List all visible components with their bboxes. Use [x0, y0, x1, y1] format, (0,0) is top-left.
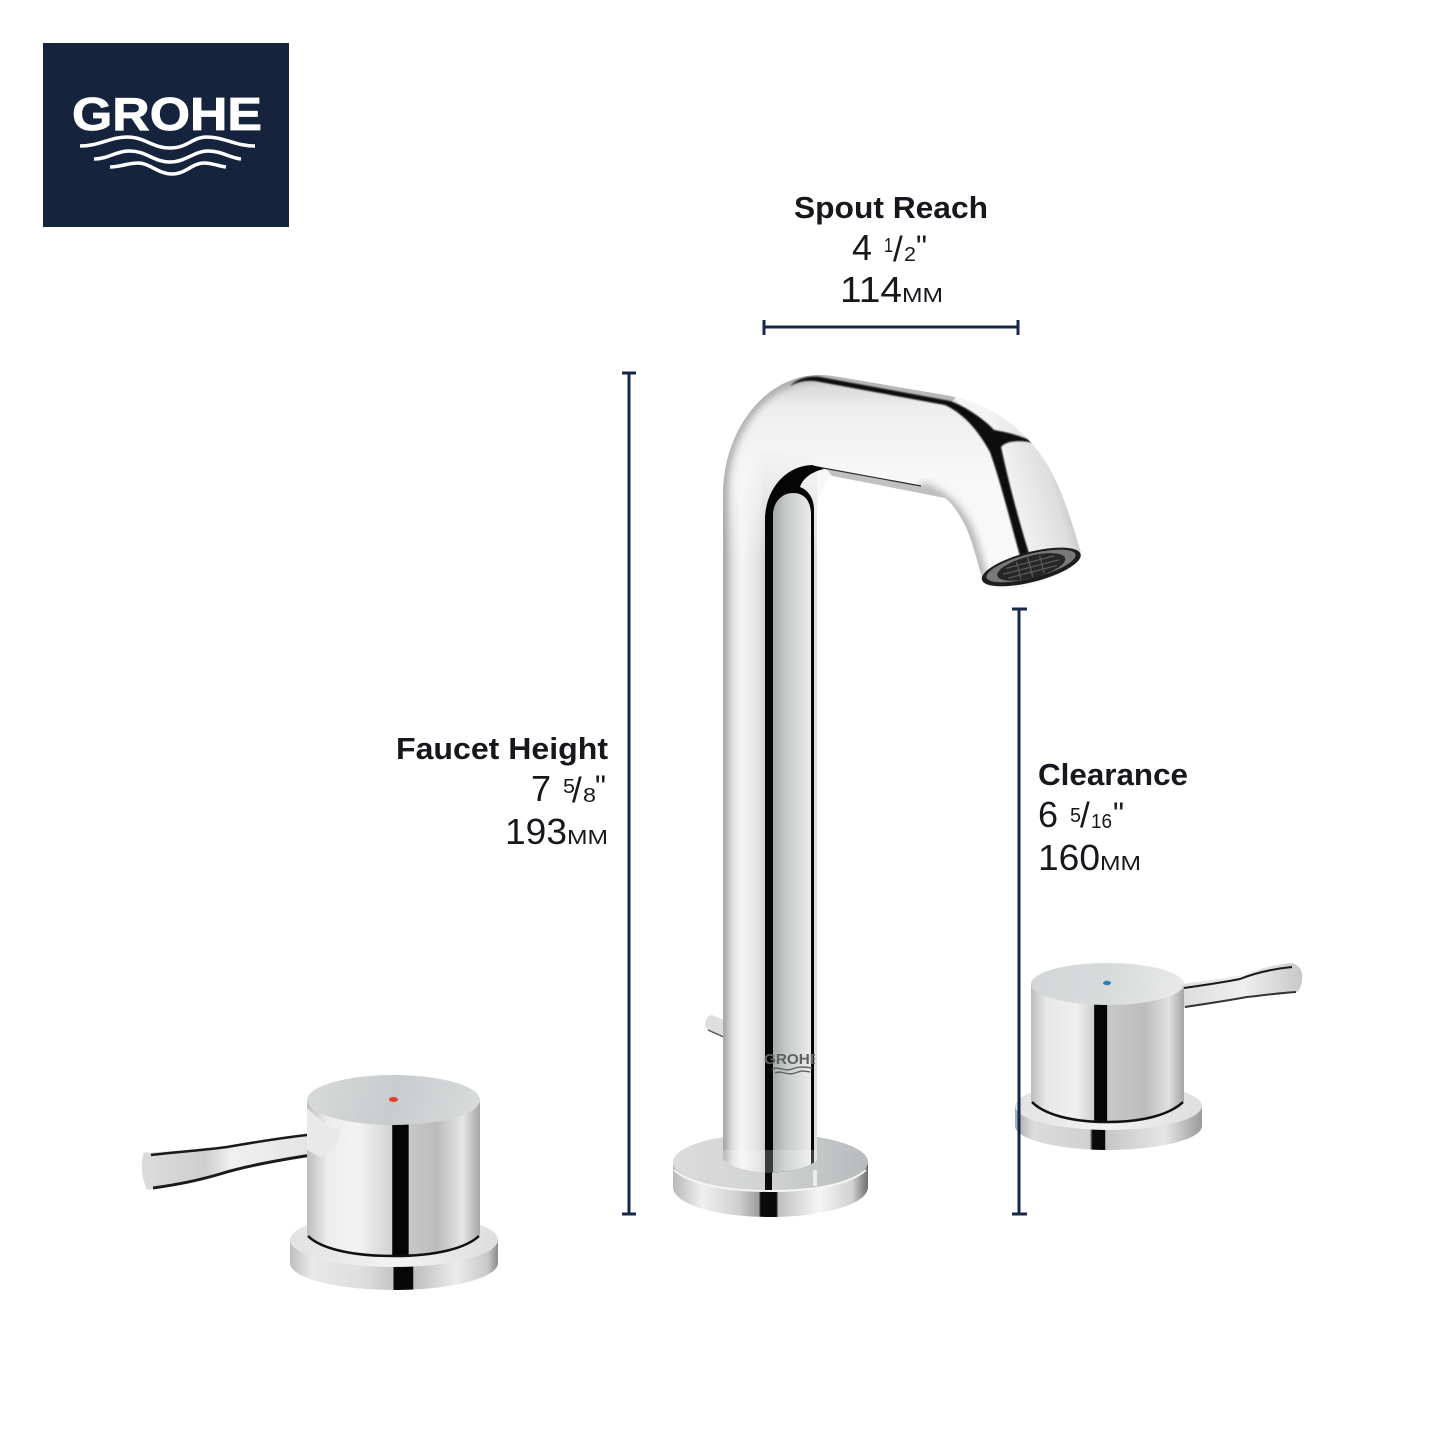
- label: spout reach: [794, 190, 988, 310]
- label: faucet height: 7: [531, 768, 551, 809]
- left handle cylinder: [307, 1075, 480, 1256]
- logo: GROHE: [43, 43, 289, 227]
- cold indicator dot: [1103, 981, 1111, 985]
- engraved logo on column: [764, 1054, 815, 1075]
- label: clearance: ": [1113, 796, 1124, 832]
- aerator: [978, 540, 1084, 594]
- right handle (cold): [1015, 963, 1302, 1150]
- logo: GROHE: GROHE: [72, 88, 262, 140]
- label: spout reach: Spout Reach: [794, 190, 988, 225]
- label: spout reach: 4: [852, 227, 872, 268]
- column lower reflection: [723, 1150, 814, 1172]
- faucet base plate: [673, 1134, 868, 1217]
- right handle lever: [1182, 963, 1302, 1008]
- pop-up rod: [705, 1015, 726, 1038]
- label: faucet height: [396, 731, 608, 852]
- label: clearance: MM: [1100, 853, 1141, 875]
- label: faucet height: Faucet Height: [396, 731, 608, 766]
- label: spout reach: 1: [884, 235, 893, 257]
- right handle cylinder: [1031, 963, 1184, 1122]
- label: spout reach: 2: [904, 244, 916, 266]
- label: spout reach: /: [893, 230, 903, 269]
- label: spout reach: 114: [840, 269, 902, 310]
- left handle base ring: [290, 1213, 498, 1290]
- label: clearance: 16: [1091, 811, 1112, 833]
- faucet body and spout: [720, 370, 1085, 1180]
- dimension line: clearance: [1012, 609, 1027, 1214]
- label: clearance: Clearance: [1038, 757, 1188, 792]
- label: faucet height: 8: [583, 785, 596, 807]
- label: clearance: 6: [1038, 794, 1058, 835]
- black reflection: column stripe: [765, 465, 824, 1175]
- label: faucet height: MM: [567, 827, 608, 849]
- left handle lever: [140, 1132, 320, 1191]
- label: clearance: 5: [1070, 805, 1081, 827]
- dimension line: spout reach: [764, 320, 1018, 335]
- label: spout reach: MM: [902, 285, 943, 307]
- engraved logo on column: GROHE: [764, 1051, 820, 1068]
- left handle (hot): [140, 1075, 498, 1290]
- label: clearance: 160: [1038, 837, 1100, 878]
- label: spout reach: ": [916, 229, 927, 265]
- label: clearance: /: [1080, 796, 1090, 835]
- black reflection: spout top: [790, 377, 1036, 556]
- label: clearance: [1038, 757, 1188, 878]
- dimension line: faucet height: [622, 373, 636, 1214]
- hot indicator dot: [389, 1097, 398, 1102]
- label: faucet height: 193: [505, 811, 567, 852]
- label: faucet height: /: [572, 771, 582, 810]
- spout underside sliver: [827, 468, 936, 496]
- main faucet: [673, 370, 1085, 1217]
- column inner panel: [773, 493, 811, 1175]
- right handle base ring: [1015, 1082, 1202, 1150]
- label: faucet height: 5: [563, 776, 575, 798]
- label: faucet height: ": [595, 769, 606, 805]
